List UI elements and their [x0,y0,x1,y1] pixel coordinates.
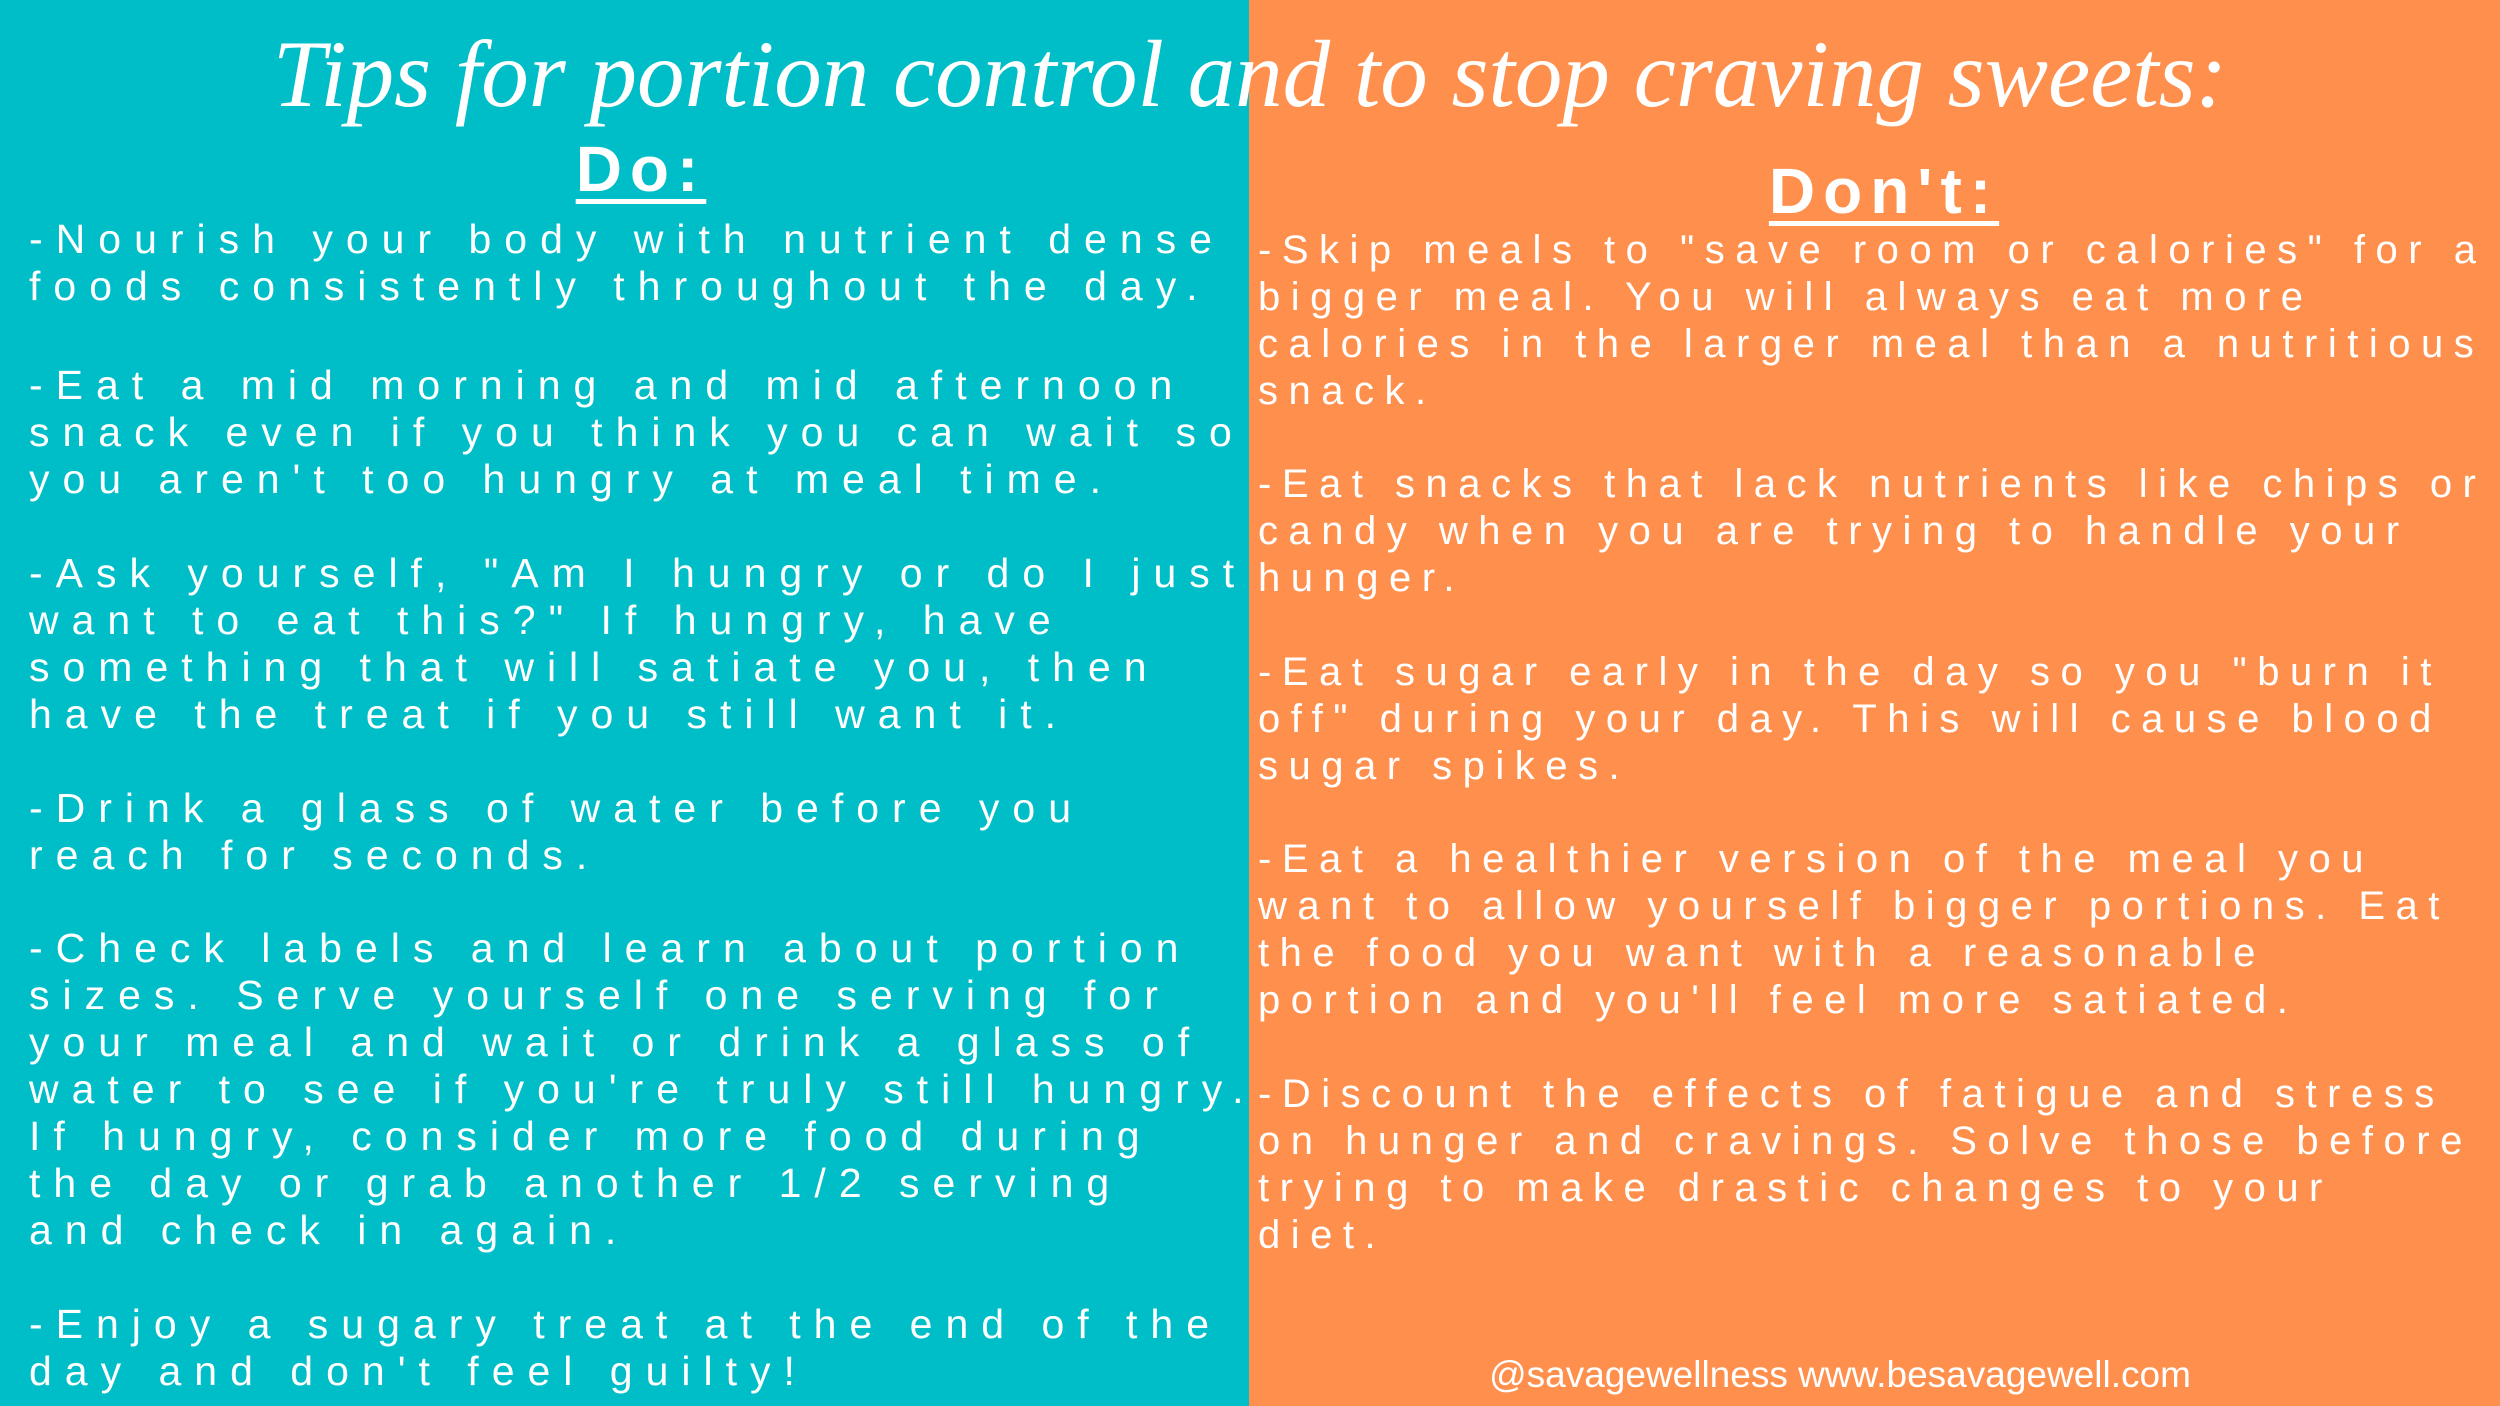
do tip 2 [29,362,1245,502]
dont tip 5: trying to make drastic changes to your [1258,1166,2333,1210]
do tip 2: snack even if you think you can wait so [29,409,1245,455]
do tip 5: sizes. Serve yourself one serving for [29,972,1171,1018]
do tip 3: want to eat this?" If hungry, have [29,597,1064,643]
dont tip 3 [1258,650,2442,788]
dont tip 2 [1258,462,2486,600]
heading: Don't: Don't: [1769,155,1999,227]
dont tip 3: off" during your day. This will cause blood [1258,697,2442,741]
dont tip 4: -Eat a healthier version of the meal you [1258,837,2374,881]
do tip 1: foods consistently throughout the day. [29,263,1211,309]
dont tip 4: the food you want with a reasonable [1258,931,2266,975]
do tip 4: -Drink a glass of water before you [29,785,1084,831]
do tip 6: -Enjoy a sugary treat at the end of the [29,1301,1222,1347]
heading: Do: Do: [576,133,706,205]
dont tip 1: -Skip meals to "save room or calories" for a [1258,228,2486,272]
dont tip 3: sugar spikes. [1258,744,1630,788]
dont tip 4: want to allow yourself bigger portions. Eat [1258,884,2450,928]
do tip 6: day and don't feel guilty! [29,1348,808,1394]
title: Tips for portion control and to stop craving sweets: [273,21,2227,127]
dont tip 1: bigger meal. You will always eat more [1258,275,2314,319]
do tip 4 [29,785,1084,878]
do tip 2: you aren't too hungry at meal time. [29,456,1114,502]
dont tip 3: -Eat sugar early in the day so you "burn it [1258,650,2442,694]
do tip 2: -Eat a mid morning and mid afternoon [29,362,1185,408]
dont tip 1 [1258,228,2486,413]
dont tip 5: -Discount the effects of fatigue and stress [1258,1072,2445,1116]
do tip 5: -Check labels and learn about portion [29,925,1192,971]
do tip 4: reach for seconds. [29,832,600,878]
do tip 1: -Nourish your body with nutrient dense [29,216,1225,262]
dont tip 1: snack. [1258,369,1437,413]
do tip 5: your meal and wait or drink a glass of [29,1019,1202,1065]
do tip 5: the day or grab another 1/2 serving [29,1160,1122,1206]
do tip 3: have the treat if you still want it. [29,691,1069,737]
dont tip 1: calories in the larger meal than a nutritious [1258,322,2484,366]
dont tip 2: candy when you are trying to handle your [1258,509,2410,553]
do tip 5: water to see if you're truly still hungry. [29,1066,1257,1112]
do tip 5: If hungry, consider more food during [29,1113,1153,1159]
dont tip 5: diet. [1258,1213,1386,1257]
dont tip 4 [1258,837,2450,1022]
dont tip 2: hunger. [1258,556,1465,600]
do tip 3: something that will satiate you, then [29,644,1160,690]
dont tip 5: on hunger and cravings. Solve those before [1258,1119,2473,1163]
dont tip 2: -Eat snacks that lack nutrients like chips or [1258,462,2486,506]
footer: @savagewellness www.besavagewell.com [1489,1354,2191,1395]
do tip 3: -Ask yourself, "Am I hungry or do I just [29,550,1247,596]
do tip 5 [28,925,1257,1253]
do tip 5: and check in again. [29,1207,629,1253]
dont tip 4: portion and you'll feel more satiated. [1258,978,2298,1022]
do tip 1 [29,216,1225,309]
dont tip 5 [1258,1072,2473,1257]
do tip 3 [28,550,1247,737]
do tip 6 [29,1301,1222,1394]
